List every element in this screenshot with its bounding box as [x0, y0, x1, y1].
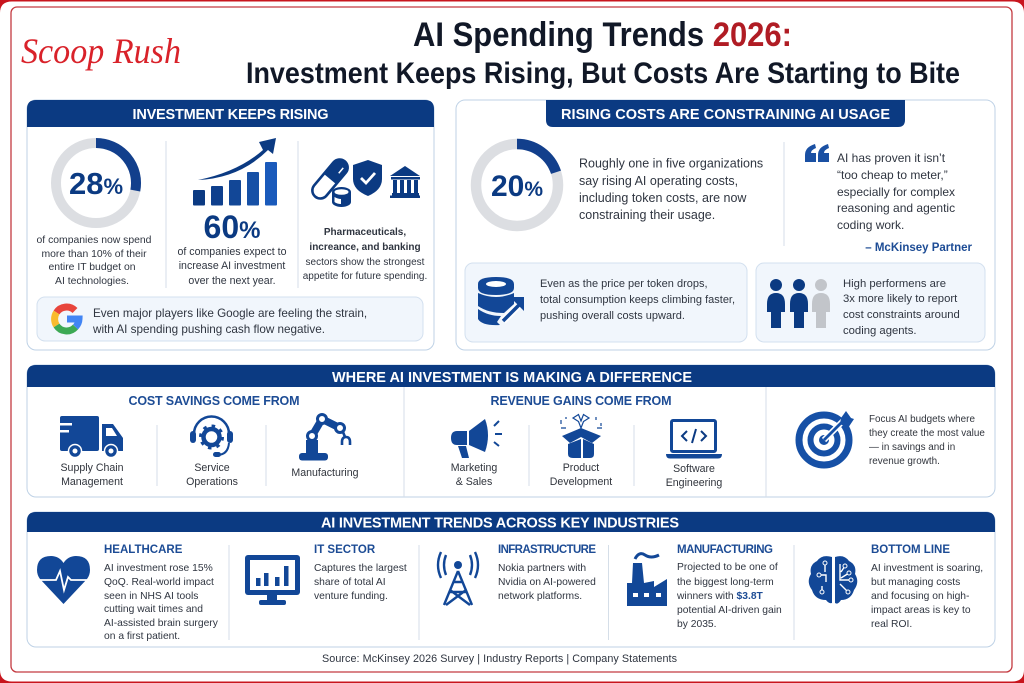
icon: radio tower [438, 552, 478, 605]
icon: target with arrow [799, 411, 854, 465]
text: manufacturing: Projected to be one of [677, 562, 778, 573]
label: marketing and sales: & Sales [456, 476, 492, 488]
text: sectors: sectors show the strongest [306, 257, 425, 268]
donut chart: 20% [476, 144, 558, 226]
title: AI Spending Trends 2026: [413, 16, 792, 54]
quote: coding work. [837, 218, 904, 232]
label: software engineering: Engineering [666, 477, 722, 489]
callout: Google: Even major players like Google are feeling the strain, [93, 307, 367, 320]
text: IT sector [314, 544, 407, 602]
label: service operations [186, 462, 238, 488]
text: healthcare: QoQ. Real-world impact [104, 577, 214, 588]
bar chart with rising arrow [193, 138, 277, 206]
icon: laptop code [666, 420, 722, 458]
label: marketing and sales: Marketing [451, 462, 497, 474]
panel: investment keeps rising [27, 100, 434, 350]
callout: high performers: cost constraints around [843, 309, 960, 321]
text: 20% description: including token costs, are now [579, 191, 747, 205]
icon: bank [390, 166, 420, 198]
source line: Source: McKinsey 2026 Survey | Industry Reports | Company Statements [322, 653, 678, 665]
brand logo: Scoop Rush: Scoop Rush [21, 31, 181, 71]
text: 60% description [178, 246, 287, 287]
label: software engineering [666, 463, 722, 489]
text: 60% description: of companies expect to [178, 246, 287, 258]
stat: 60%: 60% [204, 209, 260, 245]
heading: where AI investment [27, 365, 995, 387]
icon: open box with sparkle [561, 414, 602, 458]
text: 28% description: of companies now spend [37, 235, 152, 246]
callout: high performers: High performens are [843, 278, 946, 290]
text: sectors: increance, and banking [309, 242, 421, 253]
label: manufacturing: Manufacturing [291, 467, 359, 479]
heading: investment keeps rising [27, 100, 434, 127]
text: healthcare: HEALTHCARE [104, 544, 183, 556]
label: service operations: Service [194, 462, 230, 474]
callout: high performers: 3x more likely to report [843, 293, 958, 305]
text: healthcare: AI investment rose 15% [104, 563, 213, 574]
text: healthcare: on a first patient. [104, 631, 180, 642]
text: bottom line: and focusing on high- [871, 591, 969, 602]
text: 60% description: over the next year. [188, 275, 276, 287]
text: manufacturing: MANUFACTURING [677, 544, 773, 556]
label: supply chain management: Supply Chain [60, 462, 124, 474]
callout: token consumption: Even as the price per token drops, [540, 278, 708, 290]
text: 20% description [579, 156, 763, 222]
icon: heart with pulse [37, 556, 90, 604]
text: bottom line: BOTTOM LINE [871, 544, 950, 556]
icon: shield [353, 160, 382, 196]
heading: investment keeps rising: INVESTMENT KEEPS RISING [132, 107, 328, 123]
label: marketing and sales [451, 462, 497, 488]
heading: rising costs: RISING COSTS ARE CONSTRAINING AI USAGE [561, 107, 890, 123]
label: service operations: Operations [186, 476, 238, 488]
heading: where AI investment: WHERE AI INVESTMENT IS MAKING A DIFFERENCE [332, 370, 692, 386]
donut chart: 28% [56, 143, 136, 223]
label: software engineering: Software [673, 463, 715, 475]
quote [837, 151, 955, 232]
text: IT sector: share of total AI [314, 577, 386, 588]
donut chart: 28%: 28% [69, 166, 123, 201]
text: manufacturing: by 2035. [677, 619, 717, 630]
title: Investment Keeps Rising, But Costs Are Starting to Bite [246, 57, 960, 90]
panel: where AI investment is making a difference [27, 365, 995, 497]
text: focus AI budgets [869, 414, 985, 467]
text: sectors [303, 227, 427, 282]
text: sectors: appetite for future spending. [303, 271, 427, 282]
quote: “too cheap to meter,” [837, 168, 948, 182]
label: supply chain management: Management [61, 476, 123, 488]
subheading: cost savings: COST SAVINGS COME FROM [128, 394, 300, 408]
text: 20% description: Roughly one in five organizations [579, 156, 763, 170]
label: product development: Development [550, 476, 612, 488]
text: 20% description: say rising AI operating costs, [579, 174, 738, 188]
text: IT sector: Captures the largest [314, 563, 407, 574]
icon: monitor with bars [245, 555, 300, 605]
text: infrastructure: INFRASTRUCTURE [498, 544, 596, 556]
callout: high performers [756, 263, 985, 342]
text: 28% description: more than 10% of their [41, 249, 147, 260]
label: product development: Product [563, 462, 599, 474]
text: infrastructure: Nokia partners with [498, 563, 586, 574]
icon: quote mark [805, 144, 829, 162]
heading: key industries: AI INVESTMENT TRENDS ACROSS KEY INDUSTRIES [321, 516, 679, 532]
heading: rising costs [546, 100, 905, 127]
label: supply chain management [60, 462, 124, 488]
icon: robot arm [299, 414, 350, 460]
subheading: revenue gains: REVENUE GAINS COME FROM [490, 394, 672, 408]
callout: token consumption [465, 263, 747, 342]
icon: brain circuit [809, 556, 857, 604]
panel: AI investment trends across key industries [27, 512, 995, 647]
text: 20% description: constraining their usage. [579, 208, 715, 222]
callout: token consumption: pushing overall costs upward. [540, 310, 685, 322]
icon: Google G [55, 307, 79, 331]
text: manufacturing: the biggest long-term [677, 577, 774, 588]
icon: database with arrow [478, 277, 524, 325]
panel: rising costs [456, 100, 995, 350]
text: 28% description: entire IT budget on [48, 262, 136, 273]
text: infrastructure: Nvidia on AI-powered [498, 577, 596, 588]
text: healthcare: AI-assisted brain surgery [104, 618, 219, 629]
text: healthcare [104, 544, 219, 642]
quote: especially for complex [837, 185, 955, 199]
text: healthcare: seen in NHS AI tools [104, 591, 198, 602]
text: manufacturing: potential AI-driven gain [677, 605, 782, 616]
text: bottom line: impact areas is key to [871, 605, 971, 616]
text: IT sector: venture funding. [314, 591, 388, 602]
callout: high performers: coding agents. [843, 325, 916, 337]
icon: truck [58, 416, 123, 458]
icon: people [767, 279, 830, 328]
text: IT sector: IT SECTOR [314, 544, 376, 556]
callout: Google: with AI spending pushing cash flow negative. [92, 323, 325, 336]
text: manufacturing [676, 544, 782, 630]
donut chart: 20%: 20% [491, 170, 543, 203]
heading: key industries [27, 512, 995, 532]
text: bottom line: real ROI. [871, 619, 912, 630]
quote: AI has proven it isn’t [837, 151, 946, 165]
icon: pill capsule and pill bottle [308, 155, 352, 207]
quote attribution: – McKinsey Partner [865, 242, 973, 254]
callout: token consumption: total consumption keeps climbing faster, [540, 294, 735, 306]
text: infrastructure: network platforms. [498, 591, 582, 602]
title [246, 16, 960, 90]
text: sectors: Pharmaceuticals, [324, 227, 406, 238]
text: infrastructure [498, 544, 596, 602]
label: product development [550, 462, 612, 488]
text: focus AI budgets: Focus AI budgets where [869, 414, 975, 425]
text: focus AI budgets: — in savings and in [869, 442, 955, 453]
text: bottom line: AI investment is soaring, [871, 563, 983, 574]
quote: reasoning and agentic [837, 201, 955, 215]
text: focus AI budgets: they create the most value [869, 428, 985, 439]
text: 28% description [37, 235, 152, 287]
callout: Google [37, 297, 423, 341]
text: manufacturing: winners with $3.8T [676, 591, 764, 602]
icon: headset with gear [190, 416, 233, 457]
text: 60% description: increase AI investment [179, 260, 285, 272]
text: bottom line: but managing costs [871, 577, 960, 588]
icon: factory [627, 554, 667, 606]
text: focus AI budgets: revenue growth. [869, 456, 940, 467]
text: healthcare: cutting wait times and [104, 604, 203, 615]
text: 28% description: AI technologies. [55, 276, 129, 287]
text: bottom line [871, 544, 983, 630]
icon: megaphone [451, 419, 502, 458]
